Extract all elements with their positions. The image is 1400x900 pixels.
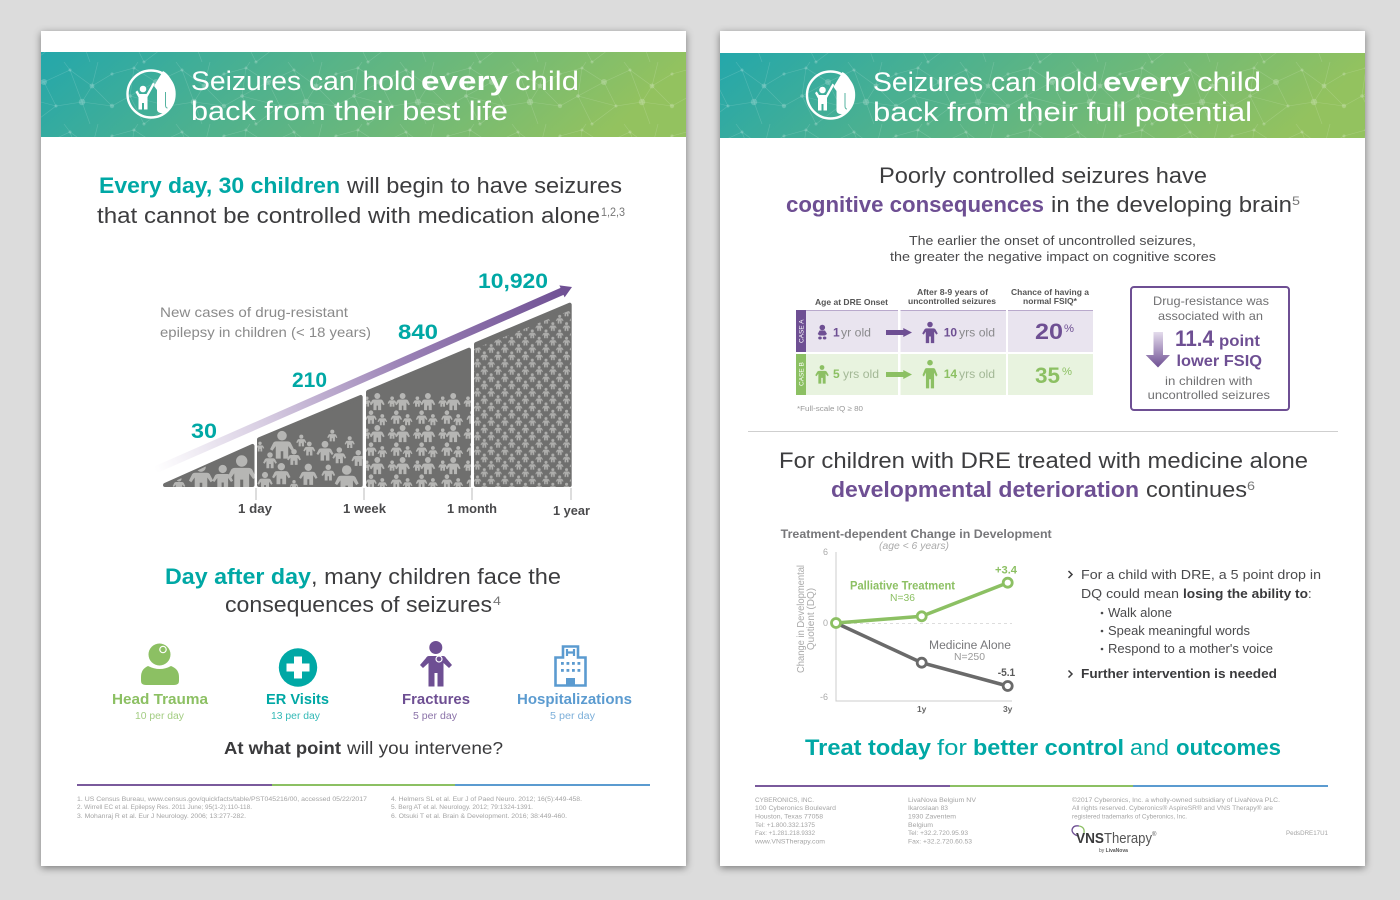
table header: Chance of having a xyxy=(1011,287,1089,297)
stat: fractures: 5 per day xyxy=(413,711,457,722)
icon: head trauma xyxy=(141,644,179,685)
heading: cognitive consequences: Poorly controlled seizures have xyxy=(879,163,1207,188)
subheading: the greater the negative impact on cognitive scores xyxy=(890,249,1217,264)
axes: 1y xyxy=(917,704,927,714)
row: case B: 35 xyxy=(1035,363,1060,388)
heading: every day: Every day, 30 children xyxy=(99,173,340,198)
heading: every day xyxy=(97,173,625,228)
footer: Belgium address: 1930 Zaventem xyxy=(908,814,956,820)
banner title: child xyxy=(1197,67,1261,97)
call to action: outcomes xyxy=(1176,735,1281,760)
question: at what point: At what point xyxy=(224,738,341,758)
chart title: (age < 6 years) xyxy=(879,540,949,552)
chart caption: epilepsy in children (< 18 years) xyxy=(160,324,371,340)
heading: cognitive consequences xyxy=(786,163,1300,217)
heading: every day: that cannot be controlled with medication alone xyxy=(97,203,600,228)
heading: developmental deterioration: developmental deterioration xyxy=(831,477,1139,502)
chart title xyxy=(781,527,1052,552)
arrow: B xyxy=(886,370,912,379)
text block: key points xyxy=(1068,567,1321,681)
table header: Age at DRE Onset xyxy=(815,297,888,307)
line chart: change in development xyxy=(781,527,1052,714)
references: 4. Helmers SL et al. Eur J of Paed Neuro. 2012; 16(5):449-458. xyxy=(391,796,582,803)
subheading xyxy=(890,233,1217,264)
icon: child B tall xyxy=(922,360,938,388)
time axis: 1 month xyxy=(447,502,497,516)
banner title: child xyxy=(515,66,579,96)
text block: key points: Further intervention is needed xyxy=(1081,666,1277,681)
table header: After 8-9 years of xyxy=(917,287,988,297)
heading: every day: will begin to have seizures xyxy=(346,173,622,198)
callout: FSIQ box: lower FSIQ xyxy=(1176,353,1262,370)
banner: left xyxy=(41,52,686,137)
text block: key points: : xyxy=(1308,586,1312,601)
question: at what point: will you intervene? xyxy=(346,738,503,758)
value labels: 840 xyxy=(398,321,438,344)
row: case A xyxy=(796,310,1093,352)
block: 1 day xyxy=(165,446,256,491)
question: at what point xyxy=(224,738,503,758)
row: case B xyxy=(796,354,1093,395)
series: medicine alone: Medicine Alone xyxy=(929,640,1011,652)
row: case A: 10 xyxy=(944,326,957,340)
footer: copyright: ©2017 Cyberonics, Inc. a wholly-owned subsidiary of LivaNova PLC. xyxy=(1072,796,1280,804)
stat: er visits xyxy=(266,648,329,722)
text block: key points: For a child with DRE, a 5 point drop in xyxy=(1081,567,1321,582)
icon: er cross xyxy=(279,648,317,687)
row: case A: 1 xyxy=(833,326,840,340)
time axis: 1 year xyxy=(553,504,590,518)
icon: child A xyxy=(922,322,938,343)
references: 6. Otsuki T et al. Brain & Development. 2016; 38:449-460. xyxy=(391,813,567,820)
call to action xyxy=(805,735,1281,760)
time axis xyxy=(238,488,590,518)
call to action: Treat today xyxy=(805,735,931,760)
footer: US address: Houston, Texas 77058 xyxy=(755,814,823,820)
arrow: down xyxy=(1146,332,1170,368)
stat: er visits: 13 per day xyxy=(271,711,320,722)
axes: -6 xyxy=(820,692,828,702)
stat: fractures xyxy=(402,641,470,722)
axes: 6 xyxy=(823,547,828,557)
series: palliative treatment: N=36 xyxy=(890,592,915,604)
text block: key points: DQ could mean xyxy=(1081,586,1179,601)
block: 1 week xyxy=(256,397,365,493)
series: medicine alone xyxy=(836,623,1015,690)
axes: 0 xyxy=(823,618,828,628)
footer: US address: Tel: +1.800.332.1375 xyxy=(755,822,815,829)
table: case comparison xyxy=(796,287,1093,413)
heading: developmental deterioration: continues xyxy=(1146,477,1247,502)
callout: FSIQ box: 11.4 xyxy=(1175,326,1215,351)
text block: key points: Speak meaningful words xyxy=(1108,623,1250,638)
row: case A: % xyxy=(1064,323,1074,335)
subheading: The earlier the onset of uncontrolled seizures, xyxy=(909,233,1196,248)
references: 1. US Census Bureau, www.census.gov/quickfacts/table/PST045216/00, accessed 05/22/2017 xyxy=(77,796,367,803)
text block: key points: Respond to a mother's voice xyxy=(1108,641,1273,656)
table footnote: *Full-scale IQ ≥ 80 xyxy=(797,404,863,413)
icon: fracture figure xyxy=(420,641,452,686)
time axis: 1 day xyxy=(238,502,272,516)
heading: day after day: , many children face the xyxy=(311,564,561,589)
series: palliative treatment: Palliative Treatment xyxy=(850,580,955,592)
banner title: back from their full potential xyxy=(873,97,1252,127)
heading: every day: 1,2,3 xyxy=(601,207,625,219)
footer: Belgium address: LivaNova Belgium NV xyxy=(908,797,976,804)
text block: key points: losing the ability to xyxy=(1183,586,1308,601)
row: case B: CASE B xyxy=(798,362,806,386)
heading: day after day: Day after day xyxy=(165,564,311,589)
stat: hospitalizations: Hospitalizations xyxy=(517,692,632,708)
footer: Belgium address xyxy=(908,797,976,846)
series: palliative treatment: +3.4 xyxy=(995,564,1018,576)
banner title: Seizures can hold xyxy=(873,67,1098,97)
value labels xyxy=(191,270,548,443)
axes xyxy=(796,547,1013,714)
references: 3. Mohanraj R et al. Eur J Neurology. 2006; 13:277-282. xyxy=(77,813,246,820)
logo: VNS Therapy: VNS xyxy=(1076,831,1104,847)
heading: developmental deterioration: For children with DRE treated with medicine alone xyxy=(779,448,1308,473)
icon: baby xyxy=(818,325,827,340)
call to action: better control xyxy=(973,735,1124,760)
heading: cognitive consequences: cognitive consequences xyxy=(786,192,1044,217)
icon: child B small xyxy=(815,365,829,384)
callout: FSIQ box: point xyxy=(1219,333,1261,350)
icon: hospital xyxy=(556,646,586,686)
stat: er visits: ER Visits xyxy=(266,692,329,708)
footer: US address: Fax: +1.281.218.9332 xyxy=(755,830,815,837)
footer: Belgium address: Tel: +32.2.720.95.93 xyxy=(908,830,968,837)
block: 1 month xyxy=(366,348,471,487)
value labels: 30 xyxy=(191,420,217,443)
footer: US address: www.VNSTherapy.com xyxy=(754,838,825,846)
chart title: Treatment-dependent Change in Development xyxy=(781,527,1052,541)
table header: normal FSIQ* xyxy=(1023,296,1078,306)
chart caption: New cases of drug-resistant xyxy=(160,304,348,320)
stat: fractures: Fractures xyxy=(402,692,470,708)
table header: uncontrolled seizures xyxy=(908,296,996,306)
row: case A: CASE A xyxy=(798,319,806,343)
footer: US address: 100 Cyberonics Boulevard xyxy=(755,805,836,812)
stat: head trauma: 10 per day xyxy=(135,711,184,722)
stat: hospitalizations xyxy=(517,646,632,722)
time axis: 1 week xyxy=(343,502,386,516)
row: case B: yrs old xyxy=(959,367,995,381)
heading: cognitive consequences: 5 xyxy=(1292,196,1300,208)
row: case B: 14 xyxy=(944,367,957,381)
document code: PedsDRE17U1 xyxy=(1286,830,1328,837)
references: 2. Wirrell EC et al. Epilepsy Res. 2011 June; 95(1-2):110-118. xyxy=(77,804,252,811)
stat: head trauma: Head Trauma xyxy=(112,692,209,708)
footer: Belgium address: Fax: +32.2.720.60.53 xyxy=(908,838,972,846)
callout: FSIQ box: in children with xyxy=(1165,374,1252,388)
chart: new cases staircase xyxy=(153,270,590,518)
footer: copyright: registered trademarks of Cyberonics, Inc. xyxy=(1072,814,1187,820)
footer: Belgium address: Ikaroslaan 83 xyxy=(908,805,948,812)
axes: Change in Developmental xyxy=(796,565,807,673)
banner: right xyxy=(720,53,1365,138)
banner title: back from their best life xyxy=(191,96,508,126)
series: palliative treatment xyxy=(832,564,1018,628)
block: 1 year xyxy=(474,305,571,487)
axes: 3y xyxy=(1003,704,1013,714)
footer: copyright: All rights reserved. Cyberonics® AspireSR® and VNS Therapy® are xyxy=(1072,804,1273,812)
banner title: every xyxy=(1103,67,1190,97)
banner title xyxy=(191,66,579,126)
footer: copyright xyxy=(1072,796,1280,820)
logo: VNS Therapy: by LivaNova xyxy=(1099,848,1128,854)
footer: US address xyxy=(754,797,836,846)
icon: adult holding child xyxy=(128,70,174,118)
text block: key points: Walk alone xyxy=(1108,605,1172,620)
series: medicine alone: -5.1 xyxy=(998,667,1015,679)
chart caption xyxy=(160,304,371,340)
arrow: A xyxy=(886,328,912,337)
icon: adult holding child xyxy=(807,72,854,118)
growth arrow xyxy=(153,285,572,473)
call to action: and xyxy=(1130,735,1169,760)
row: case B: % xyxy=(1062,366,1072,378)
banner title: every xyxy=(421,66,508,96)
value labels: 210 xyxy=(292,369,327,392)
value labels: 10,920 xyxy=(478,270,548,293)
panel: right page xyxy=(720,31,1365,866)
heading: day after day: 4 xyxy=(493,596,502,608)
row: case A: 20 xyxy=(1035,319,1063,344)
callout: FSIQ box: associated with an xyxy=(1158,309,1263,323)
heading: developmental deterioration: 6 xyxy=(1247,481,1255,493)
heading: cognitive consequences: in the developing brain xyxy=(1051,192,1292,217)
references xyxy=(77,796,582,820)
logo: VNS Therapy xyxy=(1072,826,1157,854)
table header xyxy=(815,287,1089,307)
row: case B: yrs old xyxy=(843,367,879,381)
heading: developmental deterioration xyxy=(779,448,1308,502)
heading: day after day: consequences of seizures xyxy=(225,592,492,617)
banner title xyxy=(873,67,1261,127)
series: medicine alone: N=250 xyxy=(954,651,985,663)
stat: hospitalizations: 5 per day xyxy=(550,711,595,722)
references: 5. Berg AT et al. Neurology. 2012; 79:1324-1391. xyxy=(391,804,533,811)
logo: VNS Therapy: Therapy xyxy=(1104,831,1153,847)
callout: FSIQ box xyxy=(1131,287,1289,410)
banner title: Seizures can hold xyxy=(191,66,416,96)
logo: VNS Therapy: ® xyxy=(1152,831,1157,838)
footer: Belgium address: Belgium xyxy=(908,822,933,829)
stat: head trauma xyxy=(112,644,209,722)
heading: day after day xyxy=(165,564,561,617)
callout: FSIQ box: Drug-resistance was xyxy=(1153,294,1269,308)
call to action: for xyxy=(937,735,968,760)
callout: FSIQ box: uncontrolled seizures xyxy=(1148,388,1270,402)
row: case A: yr old xyxy=(841,326,871,340)
row: case A: yrs old xyxy=(959,326,995,340)
panel: left page xyxy=(41,31,686,866)
axes: Quotient (DQ) xyxy=(806,588,817,650)
row: case B: 5 xyxy=(833,367,840,381)
footer: US address: CYBERONICS, INC. xyxy=(755,797,814,804)
